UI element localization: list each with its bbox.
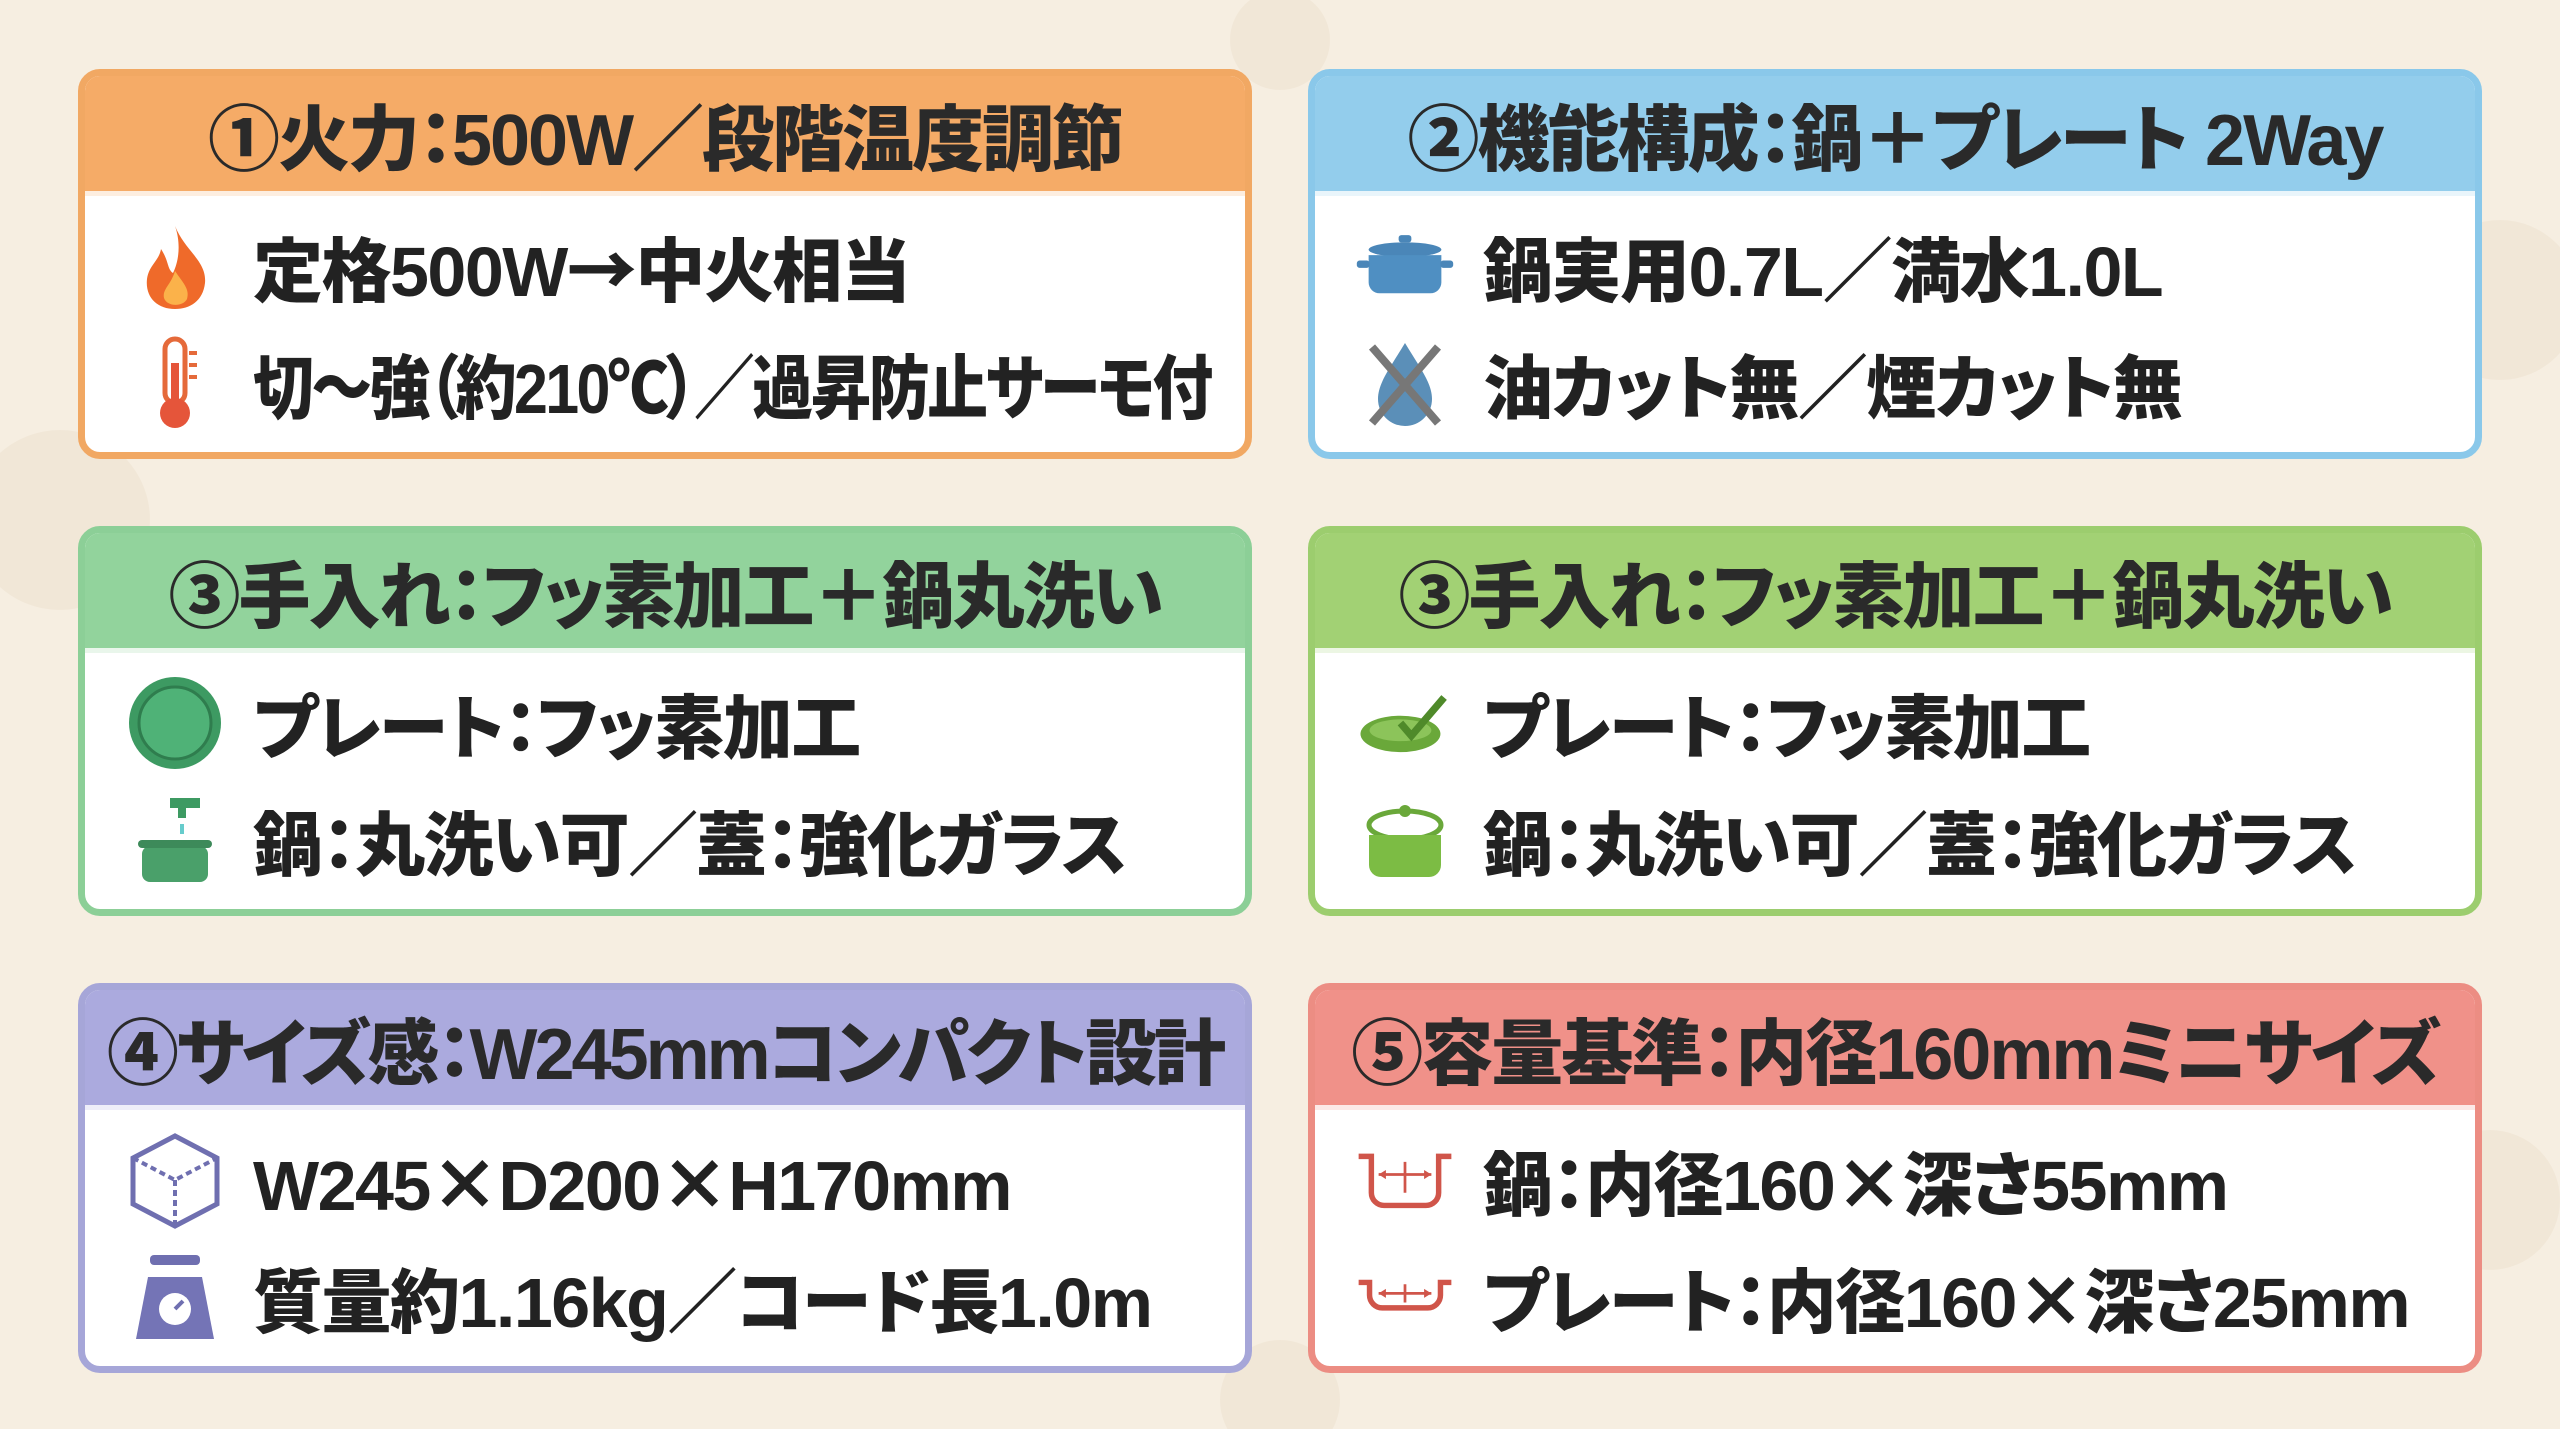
line: plate coating: プレート：フッ素加工 <box>253 690 860 768</box>
heading: size <box>85 990 1245 1110</box>
heading: power: ①火力：500W／段階温度調節 <box>208 101 1122 181</box>
heading: care left: ③手入れ：フッ素加工＋鍋丸洗い <box>168 558 1162 638</box>
heading: functions: ②機能構成：鍋＋プレート 2Way <box>1408 101 2382 181</box>
panel: care left <box>78 526 1252 916</box>
line: weight: 質量約1.16kg／コード長1.0m <box>253 1264 1151 1342</box>
panel: power <box>78 69 1252 459</box>
panel: care right <box>1308 526 2482 916</box>
line: washable pot: 鍋：丸洗い可／蓋：強化ガラス <box>253 806 1126 884</box>
heading: power <box>85 76 1245 196</box>
panel: functions <box>1308 69 2482 459</box>
line: dimensions: W245×D200×H170mm <box>253 1130 1011 1230</box>
heading: capacity <box>1315 990 2475 1110</box>
line: pot depth: 鍋：内径160×深さ55mm <box>1483 1130 2227 1230</box>
heading: care right <box>1315 533 2475 653</box>
panel: capacity <box>1308 983 2482 1373</box>
line: plate depth: プレート：内径160×深さ25mm <box>1483 1246 2409 1348</box>
line: pot capacity: 鍋実用0.7L／満水1.0L <box>1483 232 2162 310</box>
line: rated output: 定格500W→中火相当 <box>253 216 909 316</box>
heading: care right: ③手入れ：フッ素加工＋鍋丸洗い <box>1398 558 2392 638</box>
line: washable pot: 鍋：丸洗い可／蓋：強化ガラス <box>1483 806 2356 884</box>
heading: capacity: ⑤容量基準：内径160mmミニサイズ <box>1351 1015 2439 1095</box>
line: plate coating: プレート：フッ素加工 <box>1483 690 2090 768</box>
heading: functions <box>1315 76 2475 196</box>
heading: care left <box>85 533 1245 653</box>
line: temperature: 切～強（約210℃）／過昇防止サーモ付 <box>253 350 1211 428</box>
line: oil/smoke cut: 油カット無／煙カット無 <box>1483 350 2181 428</box>
panel: size <box>78 983 1252 1373</box>
heading: size: ④サイズ感：W245mmコンパクト設計 <box>107 1015 1223 1095</box>
